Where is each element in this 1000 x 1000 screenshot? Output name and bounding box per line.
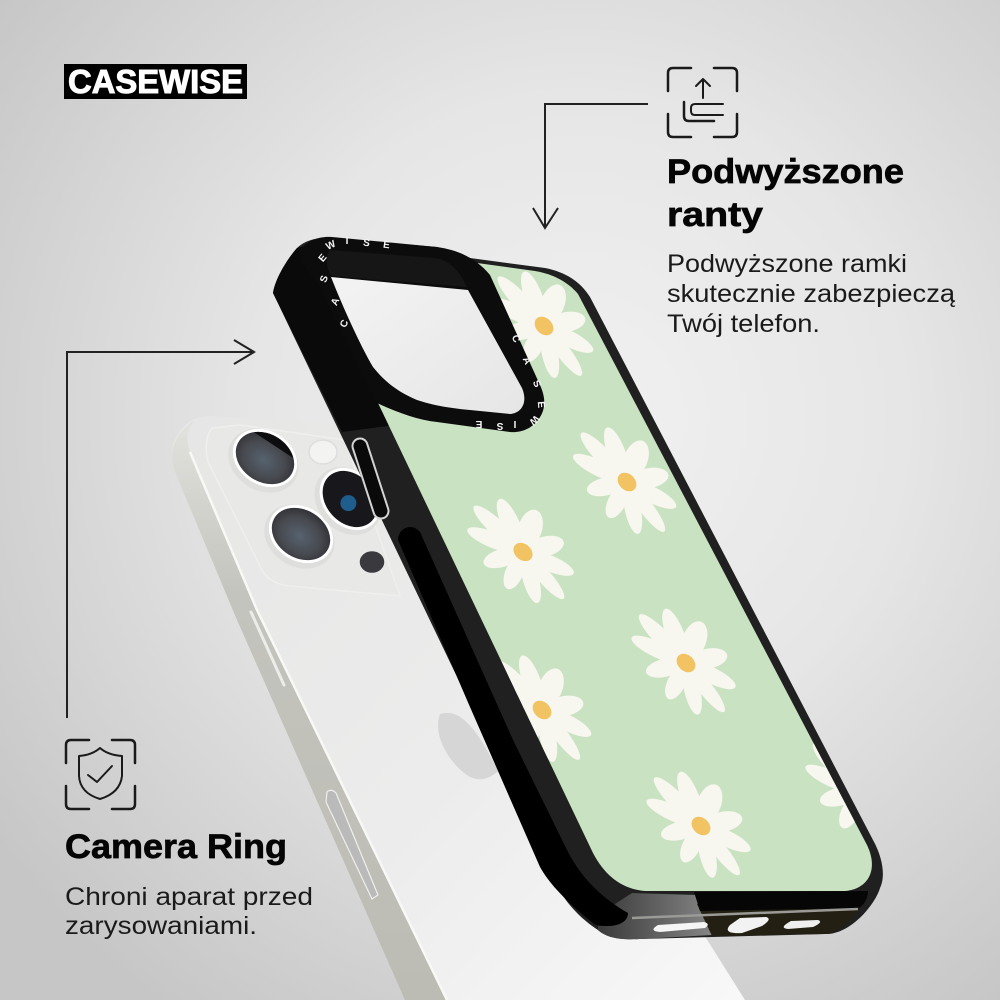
text: raised edges description (667, 250, 955, 338)
daisy 3 (464, 495, 577, 605)
daisy 5 (501, 655, 592, 762)
side highlight (190, 452, 447, 1000)
lens 1 (216, 415, 311, 506)
ring lettering: C (338, 318, 351, 330)
side button (326, 790, 378, 899)
ring lettering (317, 236, 546, 431)
ring lettering: C (509, 333, 522, 345)
ring lettering: S (530, 379, 543, 390)
mic opening (784, 920, 820, 929)
bottom lip (694, 891, 868, 911)
camera ring (300, 236, 546, 432)
ring opening (331, 277, 524, 414)
daisy 6 (646, 772, 751, 878)
ring lettering: W (324, 239, 338, 253)
phone side strip (172, 420, 447, 1000)
volume button (251, 612, 284, 685)
text: camera ring description: Chroni aparat przed (65, 883, 313, 911)
flash (309, 440, 337, 464)
arrow: left to camera ring (67, 340, 254, 718)
text: raised edges description: Podwyższone ramki (667, 250, 907, 278)
usb opening (728, 917, 769, 933)
daisy 7 (806, 744, 855, 828)
speaker opening (653, 922, 708, 932)
camera plateau (206, 425, 400, 596)
heading: Podwyższone ranty (667, 153, 904, 234)
heading: Podwyższone ranty: Podwyższone (667, 153, 904, 191)
ring lettering: S (318, 274, 331, 284)
ring lettering: W (526, 413, 541, 427)
bottom edge reflection (598, 893, 712, 939)
text: raised edges description: Twój telefon. (667, 310, 820, 338)
upper case side (273, 240, 395, 432)
ring lettering: I (513, 418, 516, 429)
ring lettering: E (382, 240, 391, 251)
ring lettering: E (475, 418, 482, 429)
arrow: top to case rim (533, 104, 648, 228)
dark slot (398, 527, 628, 926)
ring lettering: E (317, 252, 330, 264)
heading: Camera Ring: Camera Ring (65, 828, 287, 866)
daisy 1 (498, 271, 594, 378)
bottom edge right (697, 904, 862, 936)
green back panel (378, 262, 872, 891)
lip highlight (632, 909, 858, 918)
lens 2 (252, 491, 347, 582)
ring lettering: I (346, 236, 349, 247)
text: camera ring description (65, 883, 313, 940)
ring body (300, 237, 544, 432)
ring lettering: A (520, 355, 533, 367)
lens 3 (301, 453, 395, 549)
sensor (359, 550, 385, 574)
icon: raised edges (668, 68, 737, 137)
icon: shield (66, 740, 135, 809)
ring inner shadow (327, 250, 467, 287)
phone body (172, 416, 745, 1000)
logo: CASEWISE: CASEWISE (68, 63, 243, 100)
heading: Podwyższone ranty: ranty (667, 196, 763, 234)
text: camera ring description: zarysowaniami. (65, 912, 257, 940)
case frame (273, 238, 883, 939)
daisies (464, 265, 917, 882)
ring lettering: A (329, 296, 342, 308)
side button on case (360, 446, 381, 511)
daisy 2 (572, 427, 676, 534)
apple logo (438, 713, 500, 779)
ring lettering: S (362, 238, 371, 249)
text: raised edges description: skutecznie zabezpieczą (667, 280, 955, 308)
ring lettering: E (535, 401, 546, 409)
black phone case (273, 236, 917, 939)
ring lettering: S (496, 420, 503, 431)
daisy 4 (632, 608, 736, 715)
white iPhone behind the case (172, 415, 745, 1000)
